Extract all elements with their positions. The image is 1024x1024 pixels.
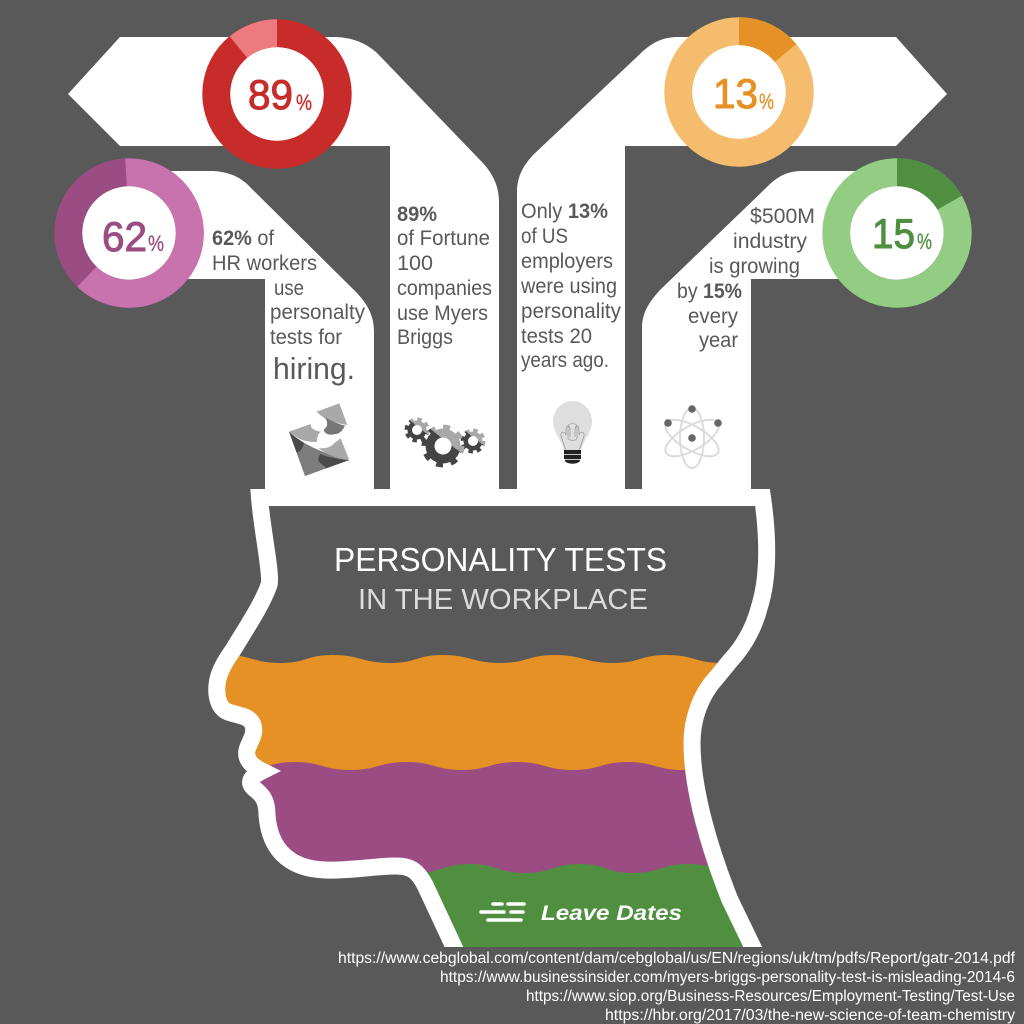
text block: 62 percent of HR workers: 62% of	[212, 227, 274, 250]
text block: 89 percent of Fortune 100	[397, 203, 492, 349]
text block: 62 percent of HR workers: personalty	[270, 301, 365, 324]
panel: second right signpost	[642, 171, 860, 489]
title: PERSONALITY TESTS	[334, 541, 667, 578]
panel: top left signpost arrow	[68, 37, 499, 489]
text block: 62 percent of HR workers: hiring.	[273, 351, 355, 386]
text block: 89 percent of Fortune 100: use Myers	[397, 302, 488, 325]
text block: 89 percent of Fortune 100: 89%	[397, 203, 437, 226]
donut: 13 percent: 13	[713, 70, 758, 117]
band: orange	[225, 655, 718, 770]
text block: only 13 percent of US employers: Only 13%	[521, 200, 608, 223]
text block: 62 percent of HR workers: use	[274, 277, 304, 300]
panel: head silhouette	[208, 489, 776, 947]
source links: https://www.businessinsider.com/myers-briggs-personality-test-is-misleading-2014-6	[440, 969, 1015, 986]
text block: 89 percent of Fortune 100: of Fortune	[397, 227, 490, 250]
icon: gears	[407, 420, 483, 464]
text block: 89 percent of Fortune 100: 100	[397, 252, 433, 275]
donut: 13 percent: %	[759, 89, 774, 114]
donut: 89 percent: %	[296, 90, 312, 115]
icon: light bulb	[553, 401, 592, 464]
donut: 89 percent: 89	[248, 71, 293, 118]
text block: 500M industry growing: by 15%	[677, 280, 742, 303]
logo: Leave Dates: Leave Dates	[541, 902, 682, 925]
text block: 62 percent of HR workers: HR workers	[212, 252, 317, 275]
icon: atom	[660, 405, 724, 468]
text block: 500M industry growing: year	[699, 329, 738, 352]
logo: Leave Dates	[481, 902, 682, 925]
donut: 89 percent	[216, 33, 338, 155]
text block: only 13 percent of US employers	[520, 200, 621, 372]
source links: https://www.siop.org/Business-Resources/Employment-Testing/Test-Use	[526, 988, 1015, 1005]
band: purple	[260, 762, 708, 873]
donut: 15 percent: %	[917, 229, 932, 254]
panel: top right signpost arrow	[517, 37, 947, 489]
text block: 62 percent of HR workers	[212, 227, 365, 386]
subtitle: IN THE WORKPLACE	[358, 584, 648, 616]
donut: 15 percent: 15	[872, 210, 915, 257]
text block: only 13 percent of US employers: of US	[521, 225, 568, 248]
text block: 500M industry growing	[677, 205, 815, 352]
text block: 62 percent of HR workers: tests for	[270, 326, 342, 349]
text block: 500M industry growing: is growing	[709, 255, 800, 278]
text block: only 13 percent of US employers: employers	[521, 250, 613, 273]
text block: 500M industry growing: industry	[733, 230, 808, 253]
text block: 500M industry growing: every	[688, 305, 738, 328]
donut: 62 percent: %	[148, 231, 164, 256]
text block: only 13 percent of US employers: personality	[521, 300, 621, 323]
donut: 62 percent: 62	[102, 213, 147, 260]
head outline	[217, 498, 767, 960]
donut: 62 percent	[68, 172, 190, 294]
donut: 13 percent	[678, 31, 800, 153]
icon: puzzle	[289, 403, 349, 476]
source links: https://www.cebglobal.com/content/dam/cebglobal/us/EN/regions/uk/tm/pdfs/Report/gatr-2014.pdf	[338, 950, 1016, 967]
donut: 15 percent	[836, 172, 958, 294]
text block: only 13 percent of US employers: years ago.	[521, 349, 609, 372]
band: green	[427, 864, 744, 947]
text block: only 13 percent of US employers: tests 20	[521, 325, 592, 348]
panel: second left signpost	[150, 171, 374, 489]
text block: 500M industry growing: $500M	[750, 205, 815, 228]
text block: only 13 percent of US employers: were using	[520, 275, 617, 298]
source links	[338, 950, 1016, 1024]
source links: https://hbr.org/2017/03/the-new-science-of-team-chemistry	[605, 1007, 1015, 1024]
text block: 89 percent of Fortune 100: companies	[397, 277, 492, 300]
text block: 89 percent of Fortune 100: Briggs	[397, 326, 453, 349]
